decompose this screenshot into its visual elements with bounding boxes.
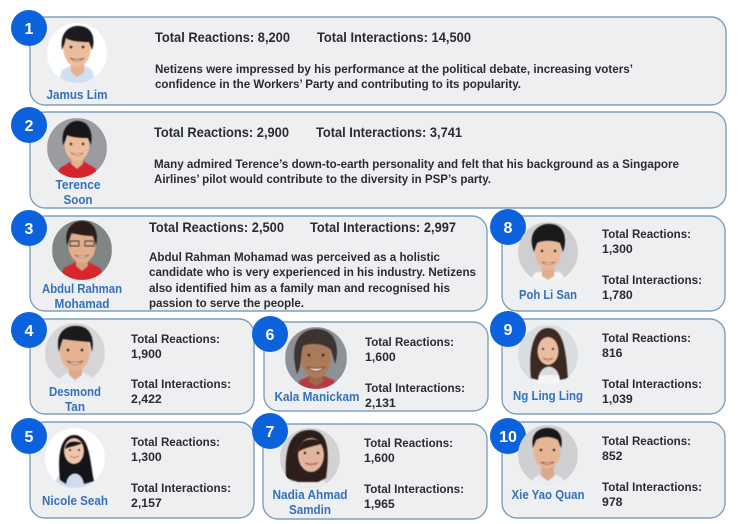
stat: total interactions: Total Interactions: 3,741 (316, 125, 462, 140)
stats: Total Interactions: (364, 482, 464, 496)
description: Many admired Terence’s down-to-earth personality and felt that his background as a Singapore (154, 157, 679, 171)
description: candidate who is very experienced in his industry. Netizens (149, 265, 476, 279)
stats: 978 (602, 495, 623, 509)
panel: 6 Kala Manickam (252, 316, 488, 411)
name: Desmond Tan: Desmond (49, 385, 101, 399)
stats: 2,131 (365, 396, 396, 410)
name: Abdul Rahman Mohamad: Abdul Rahman (42, 282, 122, 296)
stats: 2,157 (131, 496, 162, 510)
stats: 2,422 (131, 392, 162, 406)
description: passion to serve the people. (149, 296, 304, 310)
name: Nicole Seah: Nicole Seah (42, 494, 108, 508)
stats: 1,039 (602, 392, 633, 406)
stats (365, 335, 465, 410)
stats: 1,965 (364, 497, 395, 511)
stat: total interactions: Total Interactions: 2,997 (310, 220, 456, 235)
description: Netizens were impressed by his performance at the political debate, increasing voters’ (155, 62, 633, 76)
stats: 852 (602, 449, 623, 463)
portrait: Poh Li San (518, 222, 578, 282)
stats: 1,300 (131, 450, 162, 464)
name: Poh Li San: Poh Li San (519, 288, 577, 302)
stats: Total Interactions: (365, 381, 465, 395)
number badge 6 (252, 316, 288, 352)
portrait: Jamus Lim (47, 23, 107, 84)
stats: 816 (602, 346, 623, 360)
panel: 3 Abdul Rahman Mohamad (11, 210, 487, 311)
description (149, 250, 476, 310)
panel: 10 Xie Yao Quan (490, 418, 725, 518)
stats: Total Interactions: (602, 377, 702, 391)
description: confidence in the Workers’ Party and contributing to its popularity. (155, 77, 521, 91)
name: Xie Yao Quan: Xie Yao Quan (512, 488, 584, 502)
name: Nadia Ahmad Samdin: Nadia Ahmad (272, 488, 348, 502)
stats: Total Reactions: (602, 434, 691, 448)
description (154, 157, 679, 186)
name: Kala Manickam: Kala Manickam (274, 390, 360, 404)
number badge 3 (11, 210, 47, 246)
stats: Total Interactions: (602, 480, 702, 494)
panel: 2 Terence Soon (11, 107, 726, 208)
stat: total reactions: Total Reactions: 2,500 (149, 220, 284, 235)
name: Terence Soon: Terence (56, 178, 101, 192)
name: Ng Ling Ling: Ng Ling Ling (513, 389, 583, 403)
portrait: Nicole Seah (45, 428, 105, 488)
panel: 7 Nadia Ahmad Samdin (252, 413, 487, 519)
stats (131, 435, 231, 510)
number badge 2: 2 (25, 118, 34, 135)
number badge 4: 4 (25, 323, 34, 340)
name: Nadia Ahmad Samdin (272, 488, 348, 517)
portrait: Nadia Ahmad Samdin (280, 428, 340, 488)
number badge 7 (252, 413, 288, 449)
description: Airlines’ pilot would contribute to the diversity in PSP’s party. (154, 172, 491, 186)
description: also identified him as a family man and recognised his (149, 281, 450, 295)
name: Terence Soon (56, 178, 101, 207)
number badge 10 (490, 418, 526, 454)
panel: 1 Jamus Lim (11, 10, 726, 105)
number badge 2 (11, 107, 47, 143)
stat: total reactions: Total Reactions: 2,900 (154, 125, 289, 140)
stats (364, 436, 464, 511)
stats: Total Reactions: (131, 435, 220, 449)
stats: Total Interactions: (602, 273, 702, 287)
name: Desmond Tan (49, 385, 101, 414)
stats: 1,780 (602, 288, 633, 302)
name: Jamus Lim: Jamus Lim (46, 88, 108, 102)
stats: Total Reactions: (131, 332, 220, 346)
number badge 4 (11, 312, 47, 348)
number badge 8: 8 (504, 220, 513, 237)
number badge 7: 7 (266, 424, 275, 441)
stats (602, 331, 702, 406)
stats: 1,600 (364, 451, 395, 465)
number badge 10: 10 (499, 429, 517, 446)
stats: 1,600 (365, 350, 396, 364)
stats: Total Reactions: (602, 227, 691, 241)
number badge 8 (490, 209, 526, 245)
description (155, 62, 633, 91)
number badge 5 (11, 418, 47, 454)
name: Abdul Rahman Mohamad (42, 282, 122, 311)
number badge 9 (490, 311, 526, 347)
number badge 9: 9 (504, 322, 513, 339)
name: Nadia Ahmad Samdin: Samdin (289, 503, 331, 517)
description: Abdul Rahman Mohamad was perceived as a holistic (149, 250, 440, 264)
number badge 5: 5 (25, 429, 34, 446)
number badge 6: 6 (266, 327, 275, 344)
number badge 3: 3 (25, 221, 34, 238)
portrait: Ng Ling Ling (518, 325, 578, 385)
stat: total interactions: Total Interactions: 14,500 (317, 30, 471, 45)
stat: total reactions: Total Reactions: 8,200 (155, 30, 290, 45)
stats: Total Reactions: (364, 436, 453, 450)
panel: 5 Nicole Seah (11, 418, 254, 518)
stats: 1,900 (131, 347, 162, 361)
name: Desmond Tan: Tan (65, 400, 85, 414)
stats: Total Interactions: (131, 377, 231, 391)
stats: Total Reactions: (365, 335, 454, 349)
name: Terence Soon: Soon (64, 193, 92, 207)
stats: 1,300 (602, 242, 633, 256)
portrait: Desmond Tan (45, 323, 105, 383)
panel: 4 Desmond Tan (11, 312, 254, 414)
portrait: Xie Yao Quan (518, 425, 578, 485)
stats: Total Interactions: (131, 481, 231, 495)
panel: 9 Ng Ling Ling (490, 311, 725, 414)
stats: Total Reactions: (602, 331, 691, 345)
portrait: Kala Manickam (285, 327, 347, 389)
stats (602, 227, 702, 302)
stats (602, 434, 702, 509)
portrait: Terence Soon (47, 118, 107, 178)
number badge 1 (11, 10, 47, 46)
number badge 1: 1 (25, 21, 34, 38)
portrait: Abdul Rahman Mohamad (52, 220, 112, 280)
panel: 8 Poh Li San (490, 209, 725, 311)
stats (131, 332, 231, 406)
name: Abdul Rahman Mohamad: Mohamad (54, 297, 110, 311)
